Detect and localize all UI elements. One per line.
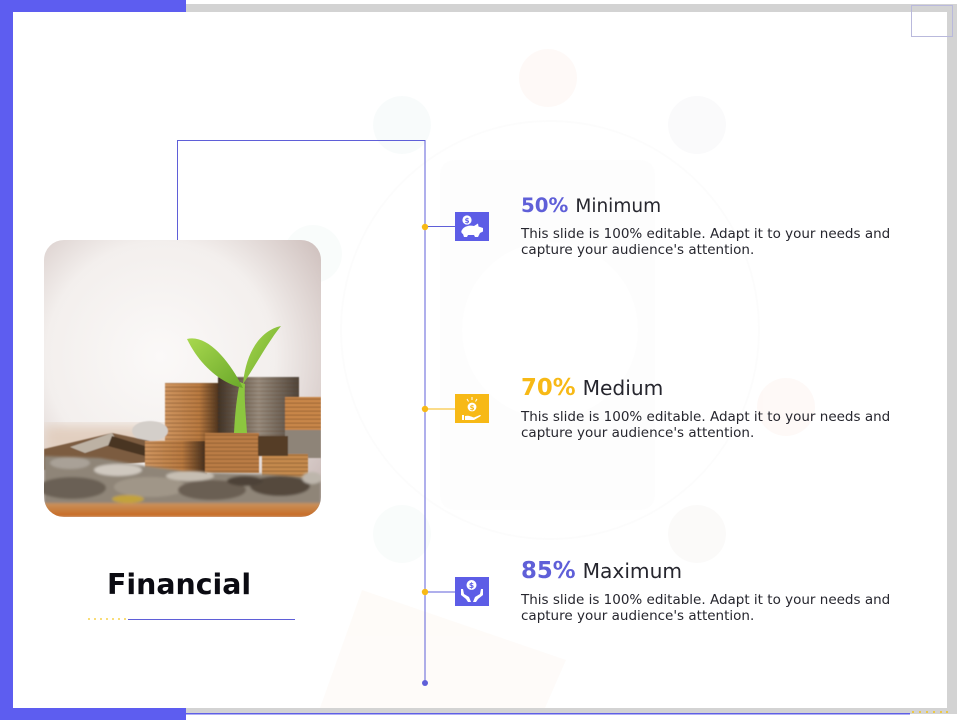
item: 50% minimum: capture your audience's attention. (521, 242, 754, 258)
icon: coin in hand: $ (470, 404, 475, 412)
icon: hands holding coin: $ (469, 581, 474, 590)
icon: coin in hand (455, 394, 489, 423)
end dot on timeline (422, 680, 428, 686)
description: This slide is 100% editable. Adapt it to your needs and (520, 592, 890, 608)
item: 70% medium (422, 375, 890, 441)
photo: coins and sprout (38, 240, 322, 517)
icon: piggy bank: $ (465, 217, 470, 225)
corner dots (912, 711, 948, 713)
timeline marker (422, 406, 455, 412)
item: 50% minimum (422, 194, 890, 258)
heading underline with dots (88, 618, 295, 620)
sprout (187, 326, 281, 433)
icon: hands holding coin (455, 577, 489, 606)
connector lines (178, 140, 425, 683)
value and label: 70% Medium (521, 375, 663, 401)
item: 85% maximum: capture your audience's attention. (521, 608, 754, 624)
description: This slide is 100% editable. Adapt it to your needs and (520, 409, 890, 425)
icon: piggy bank (455, 212, 489, 241)
timeline marker (422, 224, 455, 230)
description: This slide is 100% editable. Adapt it to your needs and (520, 226, 890, 242)
value and label: 50% Minimum (521, 194, 661, 217)
heading: Financial: Financial (107, 568, 251, 601)
foreground coins (38, 456, 322, 517)
corner outline box (912, 6, 952, 36)
item: 70% medium: capture your audience's attention. (521, 425, 754, 441)
item: 85% maximum (422, 558, 890, 624)
timeline marker (422, 589, 455, 595)
background watermark (284, 49, 815, 708)
value and label: 85% Maximum (521, 558, 682, 584)
back stacks (44, 377, 321, 480)
